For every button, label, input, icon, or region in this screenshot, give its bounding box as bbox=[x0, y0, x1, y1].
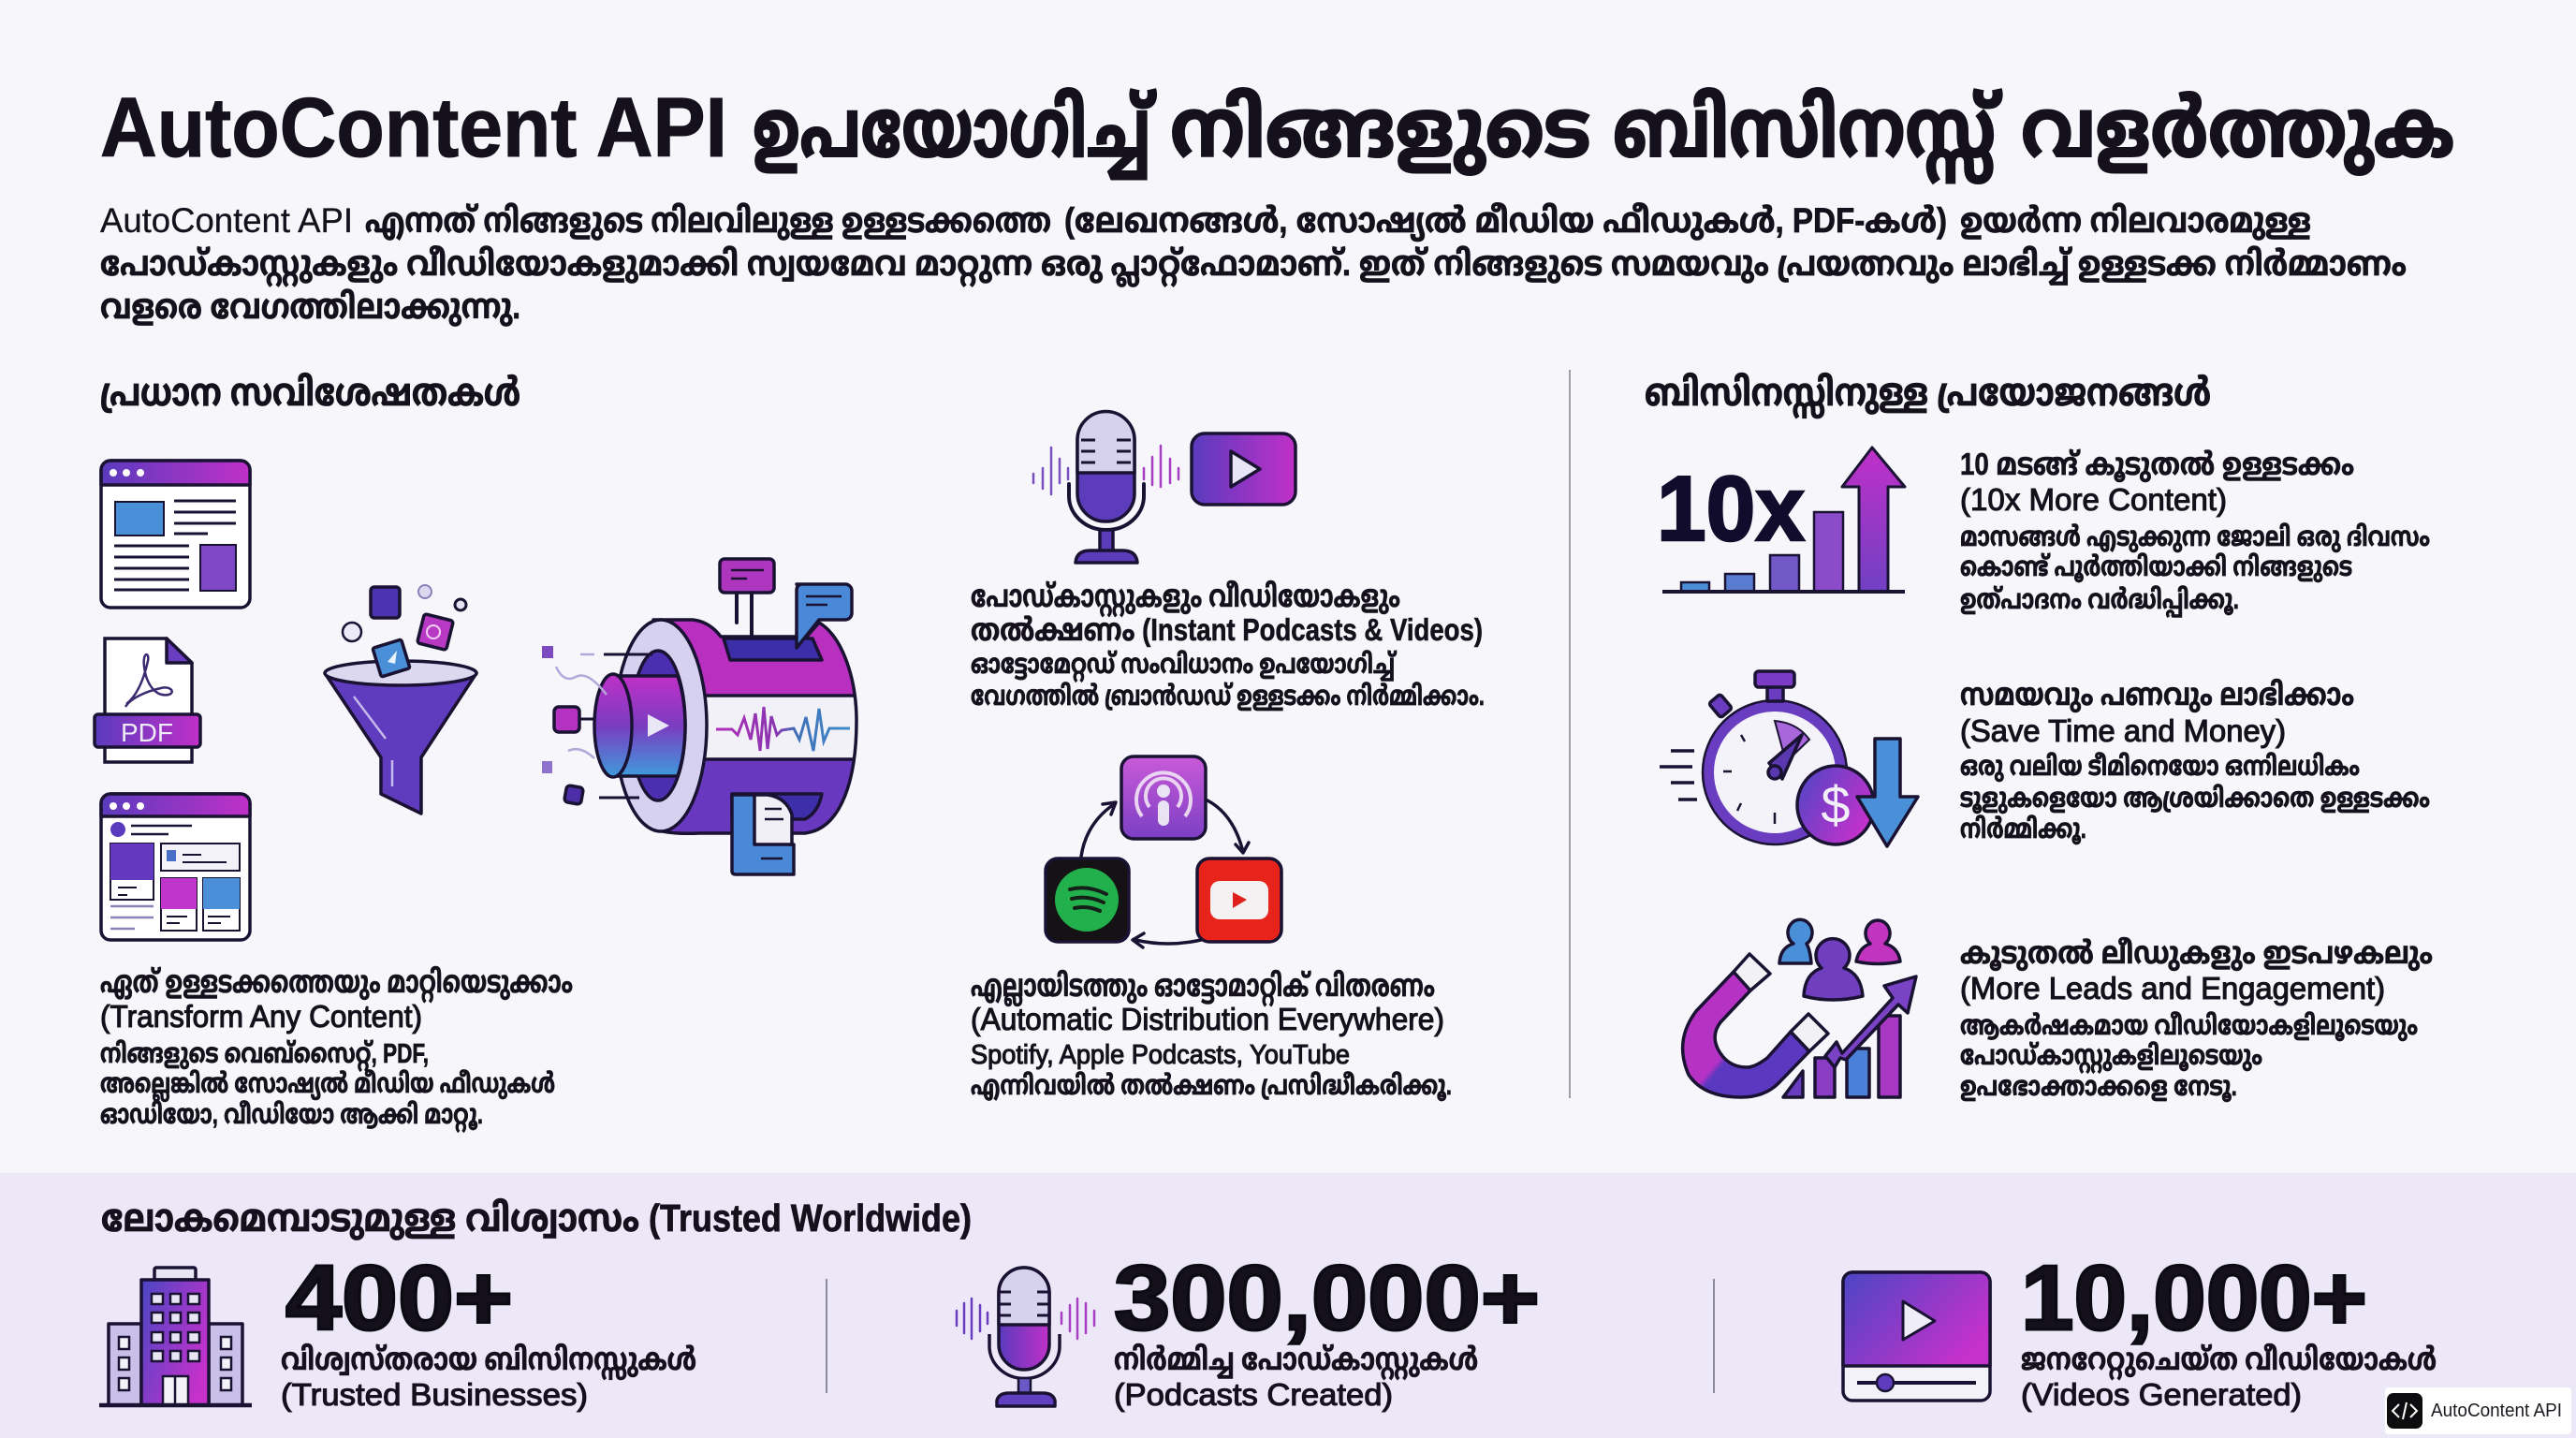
stat: 10,000+ videos generated: (Videos Generated) bbox=[2021, 1377, 2302, 1412]
caption: instant podcasts and videos: പോഡ്കാസ്റ്റുകളും വീഡിയോകളും bbox=[971, 579, 1400, 618]
intro paragraph: വളരെ വേഗത്തിലാക്കുന്നു. bbox=[100, 287, 520, 327]
caption: instant podcasts and videos bbox=[971, 579, 1485, 712]
divider 1 bbox=[826, 1279, 827, 1393]
benefit: save time and money: സമയവും പണവും ലാഭിക്കാം bbox=[1960, 677, 2354, 712]
benefit: save time and money bbox=[1960, 677, 2430, 844]
title: ഉപയോഗിച്ച് bbox=[753, 84, 1157, 179]
icon: web article document bbox=[101, 461, 250, 608]
watermark badge: AutoContent API bbox=[2431, 1401, 2562, 1421]
front ring bbox=[615, 620, 707, 831]
stat: 10,000+ videos generated: ജനറേറ്റുചെയ്ത വീഡിയോകൾ bbox=[2021, 1342, 2437, 1380]
Apple Podcasts tile bbox=[1121, 756, 1206, 839]
benefit: 10x more content: മാസങ്ങൾ എടുക്കുന്ന ജോലി ഒരു ദിവസം bbox=[1960, 522, 2430, 552]
icon: stopwatch, dollar coin and down arrow: $ bbox=[1821, 775, 1851, 834]
stat: 300,000+ podcasts created bbox=[1114, 1246, 1540, 1412]
icon: 10x growth chart: 10x bbox=[1657, 457, 1805, 560]
benefit: save time and money: (Save Time and Money) bbox=[1960, 713, 2286, 748]
icon: PDF document bbox=[95, 638, 200, 762]
benefit: 10x more content: ഉത്പാദനം വർദ്ധിപ്പിക്കൂ. bbox=[1960, 585, 2239, 618]
YouTube tile bbox=[1197, 858, 1281, 942]
caption: automatic distribution bbox=[971, 968, 1452, 1101]
caption: automatic distribution: എല്ലായിടത്തും ഓട്ടോമാറ്റിക് വിതരണം bbox=[971, 968, 1435, 1006]
benefit: more leads and engagement: ആകർഷകമായ വീഡിയോകളിലൂടെയും bbox=[1960, 1011, 2418, 1041]
icon: social media feed window bbox=[101, 794, 250, 940]
output document bbox=[732, 795, 794, 874]
benefit: more leads and engagement: ഉപഭോക്താക്കളെ നേടൂ. bbox=[1960, 1072, 2237, 1102]
intro paragraph: എന്നത് നിങ്ങളുടെ നിലവിലുള്ള ഉള്ളടക്കത്തെ bbox=[365, 201, 1051, 241]
blue speech bubble bbox=[797, 584, 852, 648]
icon: video player bbox=[1843, 1272, 1990, 1401]
caption: transform any content bbox=[100, 964, 573, 1133]
benefit: more leads and engagement: പോഡ്കാസ്റ്റുകളിലൂടെയും bbox=[1960, 1041, 2262, 1074]
stat: 10,000+ videos generated: 10,000+ bbox=[2021, 1246, 2367, 1349]
intro paragraph: AutoContent API bbox=[100, 201, 353, 240]
stat: 400+ trusted businesses bbox=[281, 1246, 696, 1412]
title: AutoContent API bbox=[100, 81, 727, 175]
stat: 400+ trusted businesses: വിശ്വസ്തരായ ബിസിനസ്സുകൾ bbox=[281, 1342, 696, 1380]
growth bars bbox=[1783, 1016, 1900, 1097]
icon: funnel with floating content bbox=[325, 585, 476, 814]
growth arrow bbox=[1825, 976, 1916, 1067]
inner media cylinder bbox=[594, 674, 685, 777]
icon: microphone bbox=[957, 1268, 1094, 1406]
stat: 300,000+ podcasts created: 300,000+ bbox=[1114, 1246, 1540, 1349]
benefit: more leads and engagement: കൂടുതൽ ലീഡുകളും ഇടപഴകലും bbox=[1960, 935, 2433, 971]
divider 2 bbox=[1713, 1279, 1715, 1393]
icon: 10x growth chart bbox=[1657, 448, 1905, 592]
intro paragraph: ഉയർന്ന നിലവാരമുള്ള bbox=[1960, 201, 2311, 241]
intro paragraph bbox=[100, 201, 2407, 327]
speech bubble top, stem bbox=[720, 559, 774, 650]
icon: stopwatch, dollar coin and down arrow bbox=[1660, 671, 1918, 846]
bottom stats band background bbox=[0, 1173, 2576, 1438]
stat: 400+ trusted businesses: (Trusted Businesses) bbox=[281, 1377, 588, 1412]
caption: automatic distribution: (Automatic Distribution Everywhere) bbox=[971, 1002, 1444, 1036]
benefit: 10x more content: (10x More Content) bbox=[1960, 482, 2227, 517]
cycle arrows bbox=[1081, 800, 1249, 947]
Spotify tile bbox=[1046, 858, 1129, 942]
icon: microphone and video play bbox=[1033, 411, 1295, 563]
caption: transform any content: ഏത് ഉള്ളടക്കത്തെയും മാറ്റിയെടുക്കാം bbox=[100, 964, 573, 1003]
benefit: more leads and engagement: (More Leads and Engagement) bbox=[1960, 971, 2385, 1005]
benefit: 10x more content: കൊണ്ട് പൂർത്തിയാക്കി നിങ്ങളുടെ bbox=[1960, 552, 2352, 582]
heading: key features: പ്രധാന സവിശേഷതകൾ bbox=[100, 371, 520, 414]
stat: 10,000+ videos generated bbox=[2021, 1246, 2437, 1412]
icon: magnet, people and growth arrow bbox=[1683, 919, 1916, 1097]
benefit: save time and money: ഒരു വലിയ ടീമിനെയോ ഒന്നിലധികം bbox=[1960, 752, 2360, 782]
caption: automatic distribution: എന്നിവയിൽ തൽക്ഷണം പ്രസിദ്ധീകരിക്കൂ. bbox=[971, 1071, 1452, 1101]
icon: distribution cycle bbox=[1046, 756, 1281, 947]
vertical divider between features and benefits bbox=[1569, 370, 1571, 1098]
stat: 400+ trusted businesses: 400+ bbox=[285, 1246, 513, 1349]
stat: 300,000+ podcasts created: (Podcasts Created) bbox=[1114, 1377, 1393, 1412]
benefit: save time and money: ടൂളുകളെയോ ആശ്രയിക്കാതെ ഉള്ളടക്കം bbox=[1960, 784, 2430, 814]
title bbox=[100, 81, 2454, 183]
person center bbox=[1804, 939, 1863, 1000]
title: ബിസിനസ്സ് bbox=[1613, 84, 2003, 183]
caption: transform any content: നിങ്ങളുടെ വെബ്സൈറ്റ്, PDF, bbox=[100, 1039, 429, 1072]
icon: PDF document: PDF bbox=[121, 718, 173, 747]
magnet bbox=[1683, 954, 1828, 1097]
intro paragraph: (ലേഖനങ്ങൾ, സോഷ്യൽ മീഡിയ ഫീഡുകൾ, PDF-കൾ) bbox=[1064, 201, 1947, 242]
icon: office building bbox=[99, 1268, 252, 1405]
heading: trusted worldwide: ലോകമെമ്പാടുമുള്ള വിശ്വാസം (Trusted Worldwide) bbox=[101, 1196, 972, 1240]
title: വളർത്തുക bbox=[2021, 84, 2454, 175]
watermark badge bbox=[2385, 1387, 2571, 1434]
ring opening bbox=[631, 651, 685, 800]
caption: transform any content: ഓഡിയോ, വീഡിയോ ആക്കി മാറ്റൂ. bbox=[100, 1100, 483, 1133]
heading: business benefits: ബിസിനസ്സിനുള്ള പ്രയോജനങ്ങൾ bbox=[1645, 371, 2211, 418]
audio waveform bbox=[716, 707, 850, 751]
input particles bbox=[542, 646, 652, 804]
machine body bbox=[651, 618, 858, 835]
caption: automatic distribution: Spotify, Apple Podcasts, YouTube bbox=[971, 1040, 1350, 1070]
caption: instant podcasts and videos: ഓട്ടോമേറ്റഡ് സംവിധാനം ഉപയോഗിച്ച് bbox=[971, 650, 1397, 682]
benefit: 10x more content bbox=[1960, 447, 2430, 618]
title: നിങ്ങളുടെ bbox=[1170, 84, 1590, 175]
benefit: 10x more content: 10 മടങ്ങ് കൂടുതൽ ഉള്ളടക്കം bbox=[1960, 447, 2354, 482]
caption: instant podcasts and videos: വേഗത്തിൽ ബ്രാൻഡഡ് ഉള്ളടക്കം നിർമ്മിക്കാം. bbox=[971, 682, 1485, 712]
stat: 300,000+ podcasts created: നിർമ്മിച്ച പോഡ്കാസ്റ്റുകൾ bbox=[1114, 1342, 1478, 1381]
person magenta bbox=[1856, 920, 1900, 964]
icon: content conversion machine bbox=[542, 559, 861, 874]
benefit: save time and money: നിർമ്മിക്കൂ. bbox=[1960, 814, 2086, 844]
benefit: more leads and engagement bbox=[1960, 935, 2433, 1102]
person blue bbox=[1779, 919, 1812, 963]
caption: transform any content: അല്ലെങ്കിൽ സോഷ്യൽ മീഡിയ ഫീഡുകൾ bbox=[100, 1069, 555, 1102]
caption: transform any content: (Transform Any Content) bbox=[100, 999, 422, 1034]
caption: instant podcasts and videos: തൽക്ഷണം (Instant Podcasts & Videos) bbox=[971, 612, 1483, 647]
